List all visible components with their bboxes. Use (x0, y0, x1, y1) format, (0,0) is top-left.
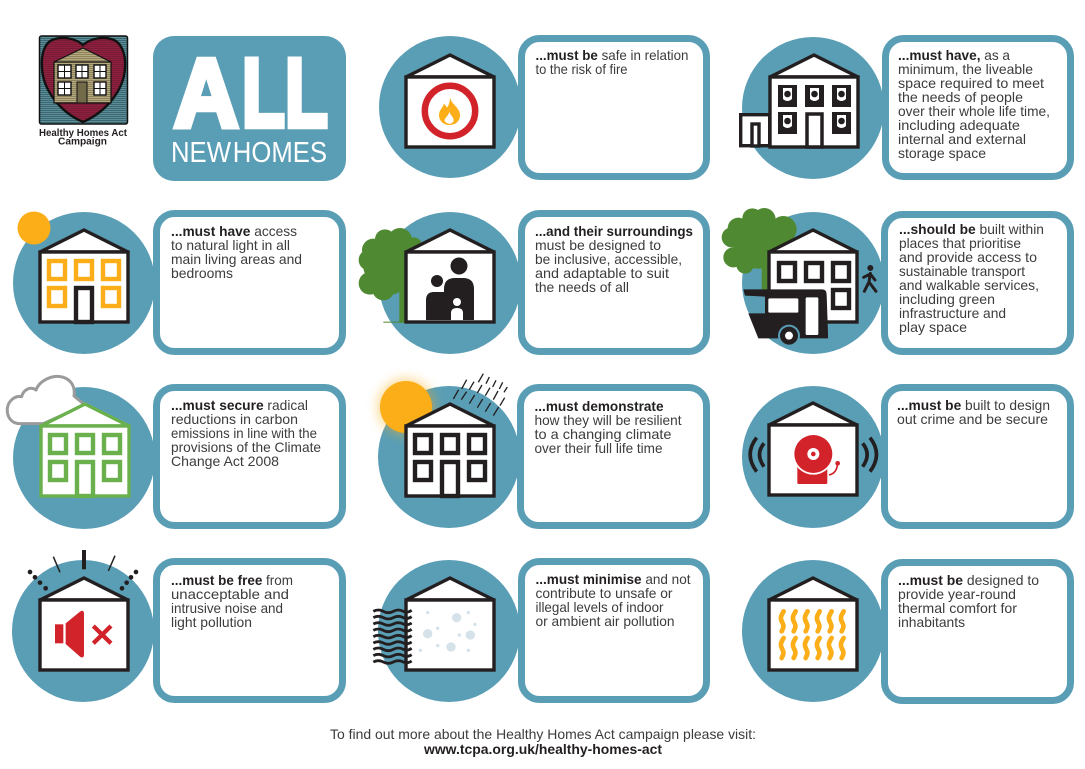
panel: climate resilience (378, 374, 706, 528)
icon: polluted air waves (373, 610, 412, 663)
text: sustainable transport: ...should be built within (899, 221, 1044, 237)
text: climate resilience: over their full life time (534, 440, 663, 456)
text: inclusive surroundings (535, 223, 693, 295)
icon: tree (359, 228, 423, 323)
text: sustainable transport: infrastructure and (899, 305, 1006, 321)
panel: natural light (13, 212, 342, 354)
text: fire safety (536, 47, 688, 77)
icon: house with lit windows (40, 230, 128, 322)
panel: air pollution (373, 560, 706, 702)
text: sustainable transport: sustainable transport (899, 263, 1025, 279)
text: sustainable transport: and walkable services, (899, 277, 1039, 293)
text: natural light: main living areas and (171, 251, 302, 267)
icon: rain (453, 374, 507, 416)
text: carbon reductions: emissions in line with the (171, 425, 317, 441)
text: liveable space: over their whole life time, (898, 103, 1050, 119)
icon: sun with glow (379, 380, 433, 434)
panel: liveable space (741, 37, 1070, 179)
text: thermal comfort: thermal comfort for (898, 600, 1017, 616)
footer: campaign link: www.tcpa.org.uk/healthy-homes-act (423, 741, 662, 757)
text: climate resilience: how they will be resilient (534, 412, 682, 428)
text: liveable space: including adequate (898, 117, 1020, 133)
text: inclusive surroundings: must be designed to (535, 237, 661, 253)
text: sustainable transport: and provide access to (899, 249, 1037, 265)
text: natural light: bedrooms (171, 265, 233, 281)
text: sustainable transport: places that prioritise (899, 235, 1021, 251)
text: fire safety: ...must be safe in relation (536, 47, 688, 63)
icon: house (769, 230, 857, 322)
text: thermal comfort (898, 572, 1039, 630)
text: liveable space: the needs of people (898, 89, 1023, 105)
panel: inclusive surroundings (359, 212, 706, 354)
text: air pollution (536, 571, 691, 629)
text: thermal comfort: ...must be designed to (898, 572, 1039, 588)
text: sustainable transport: including green (899, 291, 995, 307)
text: air pollution: illegal levels of indoor (536, 599, 664, 615)
text: liveable space: internal and external (898, 131, 1026, 147)
text: sustainable transport: play space (899, 319, 967, 335)
text: carbon reductions: ...must secure radical (171, 397, 308, 413)
footer: campaign link (330, 726, 756, 757)
icon: house with family (406, 230, 494, 322)
text: thermal comfort: inhabitants (898, 614, 965, 630)
icon: sun (18, 212, 50, 244)
text: liveable space: minimum, the liveable (898, 61, 1033, 77)
text: carbon reductions: Change Act 2008 (171, 453, 279, 469)
text: noise and light pollution (171, 572, 293, 630)
text: liveable space: space required to meet (898, 75, 1044, 91)
logo: Healthy Homes Act Campaign: Campaign (58, 136, 107, 148)
icon: house with annex and people (741, 55, 858, 147)
panel: ALL NEW HOMES title: L (242, 38, 285, 148)
text: inclusive surroundings: be inclusive, accessible, (535, 251, 682, 267)
text: noise and light pollution: ...must be free from (171, 572, 293, 588)
text: climate resilience (534, 398, 682, 456)
text: noise and light pollution: intrusive noise and (171, 600, 283, 616)
text: liveable space: ...must have, as a (898, 47, 1010, 63)
text: crime and security: out crime and be secure (897, 411, 1048, 427)
text: climate resilience: to a changing climate (534, 426, 672, 442)
icon: house with muted speaker (40, 578, 128, 670)
text: sustainable transport (899, 221, 1044, 335)
text: noise and light pollution: unacceptable and (171, 586, 289, 602)
text: air pollution: or ambient air pollution (536, 613, 674, 629)
text: natural light: ...must have access (171, 223, 297, 239)
text: natural light (171, 223, 302, 281)
text: carbon reductions (171, 397, 321, 469)
text: inclusive surroundings: and adaptable to suit (535, 265, 669, 281)
icon: house with particles (406, 578, 494, 670)
icon: noise marks (28, 550, 138, 591)
panel: ALL NEW HOMES title: A (174, 38, 239, 148)
panel: carbon reductions (7, 376, 343, 529)
icon: bus (743, 289, 828, 347)
text: carbon reductions: provisions of the Climate (171, 439, 321, 455)
text: liveable space: storage space (898, 145, 986, 161)
text: crime and security: ...must be built to design (897, 397, 1050, 413)
footer: campaign link: To find out more about the Healthy Homes Act campaign please visit: (330, 726, 756, 742)
text: inclusive surroundings: ...and their surroundings (535, 223, 693, 239)
panel: ALL NEW HOMES title: NEW HOMES (171, 137, 327, 169)
icon: house with heat waves (769, 578, 857, 670)
icon: pedestrian (864, 265, 876, 291)
logo: Healthy Homes Act Campaign (39, 36, 128, 148)
icon: house (406, 404, 494, 496)
panel: sustainable transport (722, 208, 1070, 354)
text: inclusive surroundings: the needs of all (535, 279, 629, 295)
text: liveable space (898, 47, 1050, 161)
icon: house with alarm bell (750, 403, 876, 495)
panel: noise and light pollution (12, 550, 342, 702)
panel: ALL NEW HOMES title: L (285, 38, 328, 148)
panel: thermal comfort (742, 560, 1070, 702)
panel: fire safety (379, 36, 706, 178)
text: noise and light pollution: light pollution (171, 614, 252, 630)
text: air pollution: ...must minimise and not (536, 571, 691, 587)
text: fire safety: to the risk of fire (536, 61, 628, 77)
text: crime and security (897, 397, 1050, 427)
panel: ALL NEW HOMES title (153, 36, 346, 181)
logo: Healthy Homes Act Campaign: Healthy Homes Act (39, 128, 128, 139)
icon: green house (41, 404, 129, 496)
text: natural light: to natural light in all (171, 237, 290, 253)
icon: house with fire (406, 55, 494, 147)
text: thermal comfort: provide year-round (898, 586, 1016, 602)
text: climate resilience: ...must demonstrate (534, 398, 664, 414)
text: air pollution: contribute to unsafe or (536, 585, 673, 601)
text: carbon reductions: reductions in carbon (171, 411, 298, 427)
icon: tree (722, 208, 797, 290)
icon: cloud (7, 376, 85, 424)
panel: crime and security (742, 386, 1070, 528)
